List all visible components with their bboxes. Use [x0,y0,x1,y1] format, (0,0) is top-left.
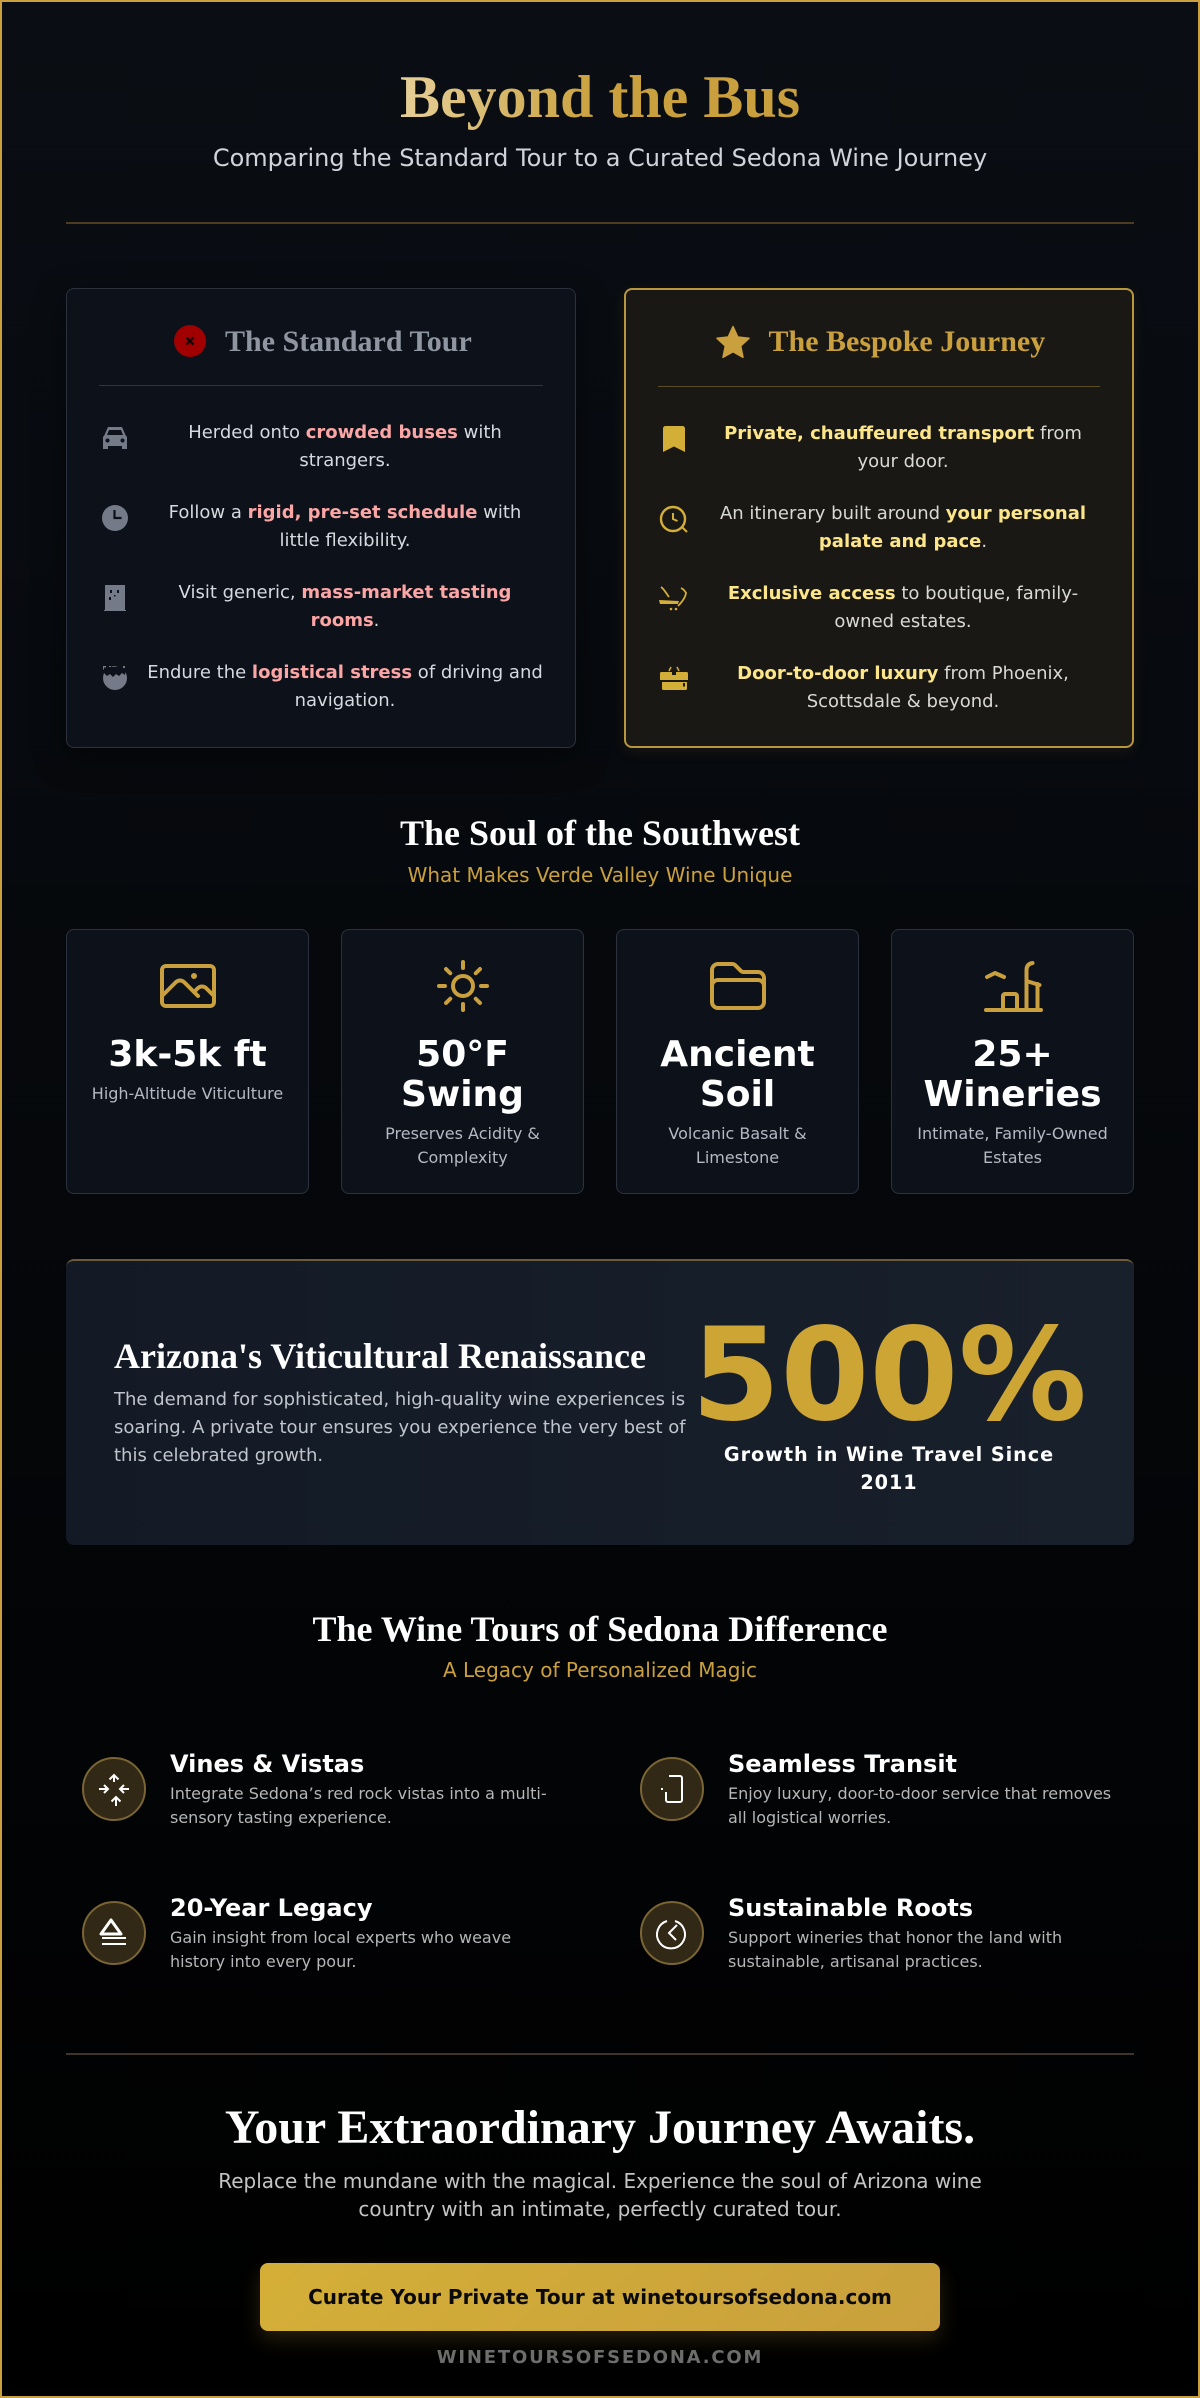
feature: vines and vistas [82,1750,547,1826]
feature text: all logistical worries. [728,1808,891,1826]
value [401,1034,524,1115]
icon: winery [984,961,1043,1012]
text: logistical stress [147,662,543,711]
title: Beyond the Bus [400,64,800,130]
icon: stress globe [103,666,127,690]
big number: 500%: 500% [691,1301,1087,1450]
footer url: WINETOURSOFSEDONA.COM [437,2347,763,2368]
label: Volcanic Basalt & [668,1124,807,1143]
value: 50°F [416,1034,509,1075]
feature text: Integrate Sedona’s red rock vistas into a multi- [170,1784,547,1802]
feature text [728,1928,1062,1970]
text: door-to-door luxury [737,662,1069,712]
icon: sun [437,960,489,1012]
heading: soul of the southwest: The Soul of the Southwest [400,813,800,853]
feature text: Gain insight from local experts who weave [170,1928,511,1946]
heading: difference: The Wine Tours of Sedona Difference [312,1609,888,1649]
label: Intimate, Family-Owned [917,1124,1108,1143]
text: exclusive access: owned estates. [834,610,972,632]
icon: search clock [660,506,688,533]
paragraph: this celebrated growth. [114,1445,323,1466]
text: crowded buses: strangers. [299,450,391,471]
feature title: Seamless Transit [728,1750,957,1778]
value: Soil [700,1074,775,1115]
label [385,1124,540,1167]
text: private transport: your door. [857,450,949,472]
feature: sustainable roots [640,1894,1062,1970]
value: 3k-5k ft [108,1034,267,1075]
panel: the standard tour [66,288,576,748]
value: Wineries [923,1074,1102,1115]
subheading: verde valley: What Makes Verde Valley Wine Unique [408,863,792,887]
heading: viticultural renaissance: Arizona's Viticultural Renaissance [114,1336,646,1376]
text: private transport: Private, chauffeured transport from [724,422,1082,444]
feature: seamless transit [640,1750,1111,1826]
paragraph: soaring. A private tour ensures you experience the very best of [114,1417,686,1438]
text: crowded buses [188,422,502,471]
icon: inward arrows [82,1757,146,1821]
text: mass-market tasting rooms: rooms. [311,610,379,631]
label: Limestone [696,1148,779,1167]
feature text [728,1784,1111,1826]
text: mass-market tasting rooms [178,582,511,631]
feature text: history into every pour. [170,1952,356,1970]
text: personal itinerary: palate and pace. [819,530,987,552]
value: Swing [401,1074,524,1115]
call to action paragraph: country with an intimate, perfectly curated tour. [358,2197,842,2221]
label: Complexity [417,1148,508,1167]
stat card: altitude [66,929,309,1194]
stat card: soil [616,929,859,1194]
feature title: Vines & Vistas [170,1750,364,1778]
text: personal itinerary [720,502,1086,552]
icon: star [716,326,750,358]
label: High-Altitude Viticulture [92,1084,283,1103]
feature text: Enjoy luxury, door-to-door service that removes [728,1784,1111,1802]
text: door-to-door luxury: Scottsdale & beyond. [807,690,999,712]
paragraph: The demand for sophisticated, high-quality wine experiences is [114,1389,685,1410]
label [917,1124,1108,1167]
caption: Growth in Wine Travel Since [724,1443,1054,1466]
button [260,2263,940,2331]
value [923,1034,1102,1115]
icon: clock [102,505,128,531]
value [660,1034,815,1115]
paragraph [114,1389,686,1466]
text: rigid schedule: little flexibility. [280,530,410,551]
subtitle: Comparing the Standard Tour to a Curated Sedona Wine Journey [213,144,987,172]
icon: folder [710,962,766,1010]
feature: 20-year legacy [82,1894,511,1970]
caption: 2011 [860,1471,918,1494]
feature title: Sustainable Roots [728,1894,973,1922]
label: Preserves Acidity & [385,1124,540,1143]
text: mass-market tasting rooms: Visit generic, mass-market tasting [179,582,511,603]
icon: open ring [640,1901,704,1965]
icon: car [103,427,127,449]
text: crowded buses: Herded onto crowded buses with [188,422,502,443]
call to action paragraph: Replace the mundane with the magical. Experience the soul of Arizona wine [218,2169,982,2193]
value: Ancient [660,1034,815,1075]
icon: building [104,585,126,611]
text: logistical stress: Endure the logistical stress of driving and [147,662,543,683]
text: rigid schedule [169,502,521,551]
feature text [170,1928,511,1970]
text: exclusive access [728,582,1078,632]
icon: landscape photo [160,964,216,1008]
feature text: sensory tasting experience. [170,1808,392,1826]
icon: door [640,1757,704,1821]
call to action paragraph [218,2169,982,2221]
feature text [170,1784,547,1826]
text: logistical stress: navigation. [295,690,395,711]
feature title: 20-Year Legacy [170,1894,372,1922]
heading: the bespoke journey: The Bespoke Journey [768,325,1045,358]
label [668,1124,807,1167]
icon: exclusive access sprig [659,586,687,610]
heading: call to action: Your Extraordinary Journey Awaits. [225,2101,975,2154]
heading: the standard tour: The Standard Tour [225,325,472,358]
stat card: wineries [891,929,1134,1194]
text: door-to-door luxury: Door-to-door luxury from Phoenix, [737,662,1069,684]
caption [724,1443,1054,1494]
feature text: sustainable, artisanal practices. [728,1952,983,1970]
icon: briefcase [660,666,688,690]
icon: red x badge [174,325,206,357]
panel: arizona renaissance [66,1259,1134,1545]
subheading: legacy: A Legacy of Personalized Magic [443,1658,757,1682]
icon: bookmark [663,426,685,452]
button: Curate Your Private Tour at winetoursofsedona.com [308,2285,892,2309]
label: Estates [983,1148,1042,1167]
stat card: temperature swing [341,929,584,1194]
text: private transport [724,422,1082,472]
feature text: Support wineries that honor the land with [728,1928,1062,1946]
text: personal itinerary: An itinerary built around your personal [720,502,1086,524]
text: rigid schedule: Follow a rigid, pre-set schedule with [169,502,521,523]
panel: the bespoke journey [624,288,1134,748]
text: exclusive access: Exclusive access to boutique, family- [728,582,1078,604]
value: 25+ [972,1034,1053,1075]
icon: stacked triangle [82,1901,146,1965]
